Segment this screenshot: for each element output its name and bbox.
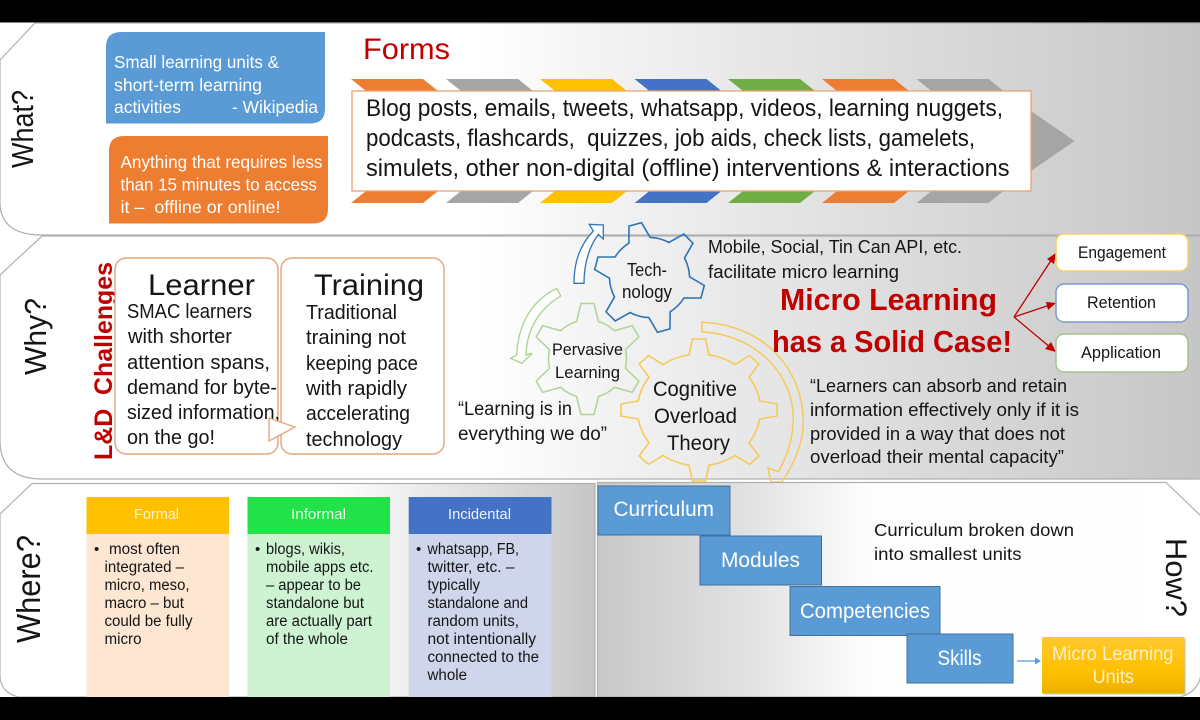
- text block: technology facilitators: [708, 236, 962, 282]
- panel: Where?: [0, 484, 595, 697]
- quote: learning is in everything: [458, 399, 607, 445]
- column: Formal: [86, 497, 229, 697]
- box: Skills: Skills: [938, 647, 982, 670]
- box: Retention: Retention: [1087, 294, 1156, 312]
- column: Incidental: standalone and: [428, 595, 528, 612]
- icon: green curved arrow: [511, 288, 561, 363]
- column: Incidental: connected to the: [428, 649, 539, 666]
- label: Pervasive Learning: Learning: [555, 363, 620, 382]
- heading: Micro Learning has a Solid Case: [772, 282, 1012, 359]
- text block: curriculum broken down: [874, 520, 1074, 564]
- text block: technology facilitators: facilitate micro learning: [708, 261, 899, 282]
- top black band: [0, 0, 1200, 22]
- column: Informal: •: [255, 541, 260, 558]
- label: Technology: [622, 260, 672, 302]
- card: Learner: with shorter: [127, 325, 232, 348]
- heading: How?: How?: [1159, 538, 1192, 617]
- heading: Micro Learning has a Solid Case: has a Solid Case!: [772, 324, 1012, 359]
- box: Curriculum: Curriculum: [614, 498, 714, 521]
- callout: definition from Wikipedia: - Wikipedia: [232, 97, 318, 117]
- label: Pervasive Learning: Pervasive: [552, 340, 623, 359]
- column: Incidental: [409, 497, 552, 697]
- column: Informal: – appear to be: [266, 577, 361, 594]
- column: Formal: most often: [109, 541, 180, 558]
- column: Incidental: whole: [427, 667, 467, 684]
- column: Formal: •: [94, 541, 99, 558]
- heading: Why?: Why?: [18, 298, 53, 375]
- column: Formal: micro, meso,: [104, 577, 190, 594]
- column: Informal: [248, 497, 390, 697]
- column: Informal: standalone but: [266, 595, 365, 612]
- callout: definition from Wikipedia: activities: [114, 97, 181, 117]
- box: Retention: [1056, 284, 1188, 322]
- callout: 15 minutes definition: Anything that requires less: [120, 152, 323, 172]
- quote: cognitive overload: [810, 375, 1079, 467]
- label: Cognitive Overload Theory: [653, 377, 737, 455]
- box: Micro Learning Units: [1042, 637, 1186, 694]
- box: Competencies: [790, 586, 940, 636]
- box: Application: [1056, 334, 1188, 372]
- label: Pervasive Learning: [552, 340, 623, 382]
- card: Learner: demand for byte-: [127, 376, 277, 399]
- card: Learner: on the go!: [127, 426, 215, 449]
- card: Learner: [115, 258, 280, 454]
- callout: definition from Wikipedia: [106, 32, 325, 124]
- heading: What?: What?: [5, 90, 40, 168]
- callout: definition from Wikipedia: Small learning units &: [114, 52, 279, 72]
- icon: blue curved arrow: [574, 224, 603, 283]
- box: Engagement: Engagement: [1078, 244, 1166, 262]
- box: Curriculum: [598, 486, 730, 535]
- arrow: forms chevron band: [351, 79, 1074, 203]
- card: Training: Training: [314, 269, 424, 302]
- quote: cognitive overload: overload their mental capacity”: [810, 446, 1064, 467]
- column: Informal: blogs, wikis,: [266, 541, 345, 558]
- panel: Why?: [0, 219, 1200, 482]
- label: Cognitive Overload Theory: Cognitive: [653, 377, 737, 401]
- callout: 15 minutes definition: it – offline or online!: [120, 197, 280, 217]
- column: Formal: micro: [104, 631, 142, 648]
- box: Micro Learning Units: Units: [1092, 667, 1134, 688]
- heading: L&D Challenges: L&D Challenges: [90, 262, 118, 460]
- callout: 15 minutes definition: than 15 minutes to access: [120, 174, 317, 194]
- icon: Pervasive Learning gear: [530, 304, 645, 414]
- box: Modules: Modules: [721, 549, 800, 572]
- column: Incidental: •: [416, 541, 421, 558]
- box: Competencies: Competencies: [800, 600, 930, 623]
- box: Modules: [700, 536, 822, 585]
- quote: learning is in everything: “Learning is in: [458, 399, 572, 420]
- card: Training: [281, 258, 444, 454]
- text block: list of forms: [352, 91, 1031, 191]
- column: Incidental: random units,: [428, 613, 519, 630]
- card: Training: Traditional: [306, 301, 397, 324]
- icon: Cognitive Overload gear: [621, 339, 777, 481]
- column: Informal: of the whole: [266, 631, 348, 648]
- arrows: case to outcomes: [1014, 253, 1056, 352]
- label: Cognitive Overload Theory: Overload: [654, 404, 737, 428]
- label: Technology: Tech-: [627, 260, 667, 280]
- panel: How?: [598, 482, 1200, 697]
- text block: list of forms: podcasts, flashcards, quizzes, job aids, check lists, gamelets,: [366, 125, 975, 152]
- column: Incidental: twitter, etc. –: [428, 559, 515, 576]
- box: Application: Application: [1081, 344, 1161, 362]
- column: Incidental: Incidental: [448, 507, 511, 523]
- quote: cognitive overload: “Learners can absorb and retain: [810, 375, 1067, 396]
- card: Learner: sized information,: [127, 401, 280, 424]
- box: Skills: [907, 634, 1013, 683]
- callout: 15 minutes definition: [109, 136, 328, 224]
- icon: Technology gear: [591, 219, 708, 336]
- column: Incidental: not intentionally: [428, 631, 536, 648]
- text block: technology facilitators: Mobile, Social, Tin Can API, etc.: [708, 236, 962, 257]
- column: Formal: macro – but: [104, 595, 185, 612]
- panel: What?: [0, 23, 1200, 235]
- column: Formal: could be fully: [104, 613, 193, 630]
- box: Engagement: [1056, 234, 1188, 271]
- column: Formal: Formal: [134, 507, 179, 523]
- column: Informal: are actually part: [266, 613, 373, 630]
- column: Informal: mobile apps etc.: [266, 559, 374, 576]
- quote: cognitive overload: provided in a way that does not: [810, 423, 1065, 444]
- column: Informal: Informal: [291, 507, 346, 523]
- card: Training: keeping pace: [306, 352, 418, 375]
- quote: learning is in everything: everything we do”: [458, 424, 607, 445]
- bottom black band: [0, 697, 1200, 720]
- arrow: skills to micro learning units: [1017, 658, 1041, 664]
- card: Learner: attention spans,: [127, 351, 270, 374]
- card: Training: with rapidly: [305, 377, 408, 400]
- heading: Micro Learning has a Solid Case: Micro Learning: [780, 282, 997, 317]
- text block: curriculum broken down: into smallest units: [874, 544, 1022, 564]
- column: Formal: integrated –: [104, 559, 184, 576]
- heading: Forms: Forms: [363, 33, 450, 66]
- label: Cognitive Overload Theory: Theory: [667, 431, 730, 455]
- column: Incidental: typically: [428, 577, 480, 594]
- card: Learner: Learner: [148, 269, 255, 302]
- card: Learner: SMAC learners: [127, 300, 252, 323]
- text block: list of forms: Blog posts, emails, tweets, whatsapp, videos, learning nuggets,: [366, 95, 1003, 122]
- quote: cognitive overload: information effectively only if it is: [810, 399, 1079, 420]
- box: Micro Learning Units: Micro Learning: [1052, 644, 1174, 665]
- label: Technology: nology: [622, 282, 672, 302]
- text block: list of forms: simulets, other non-digital (offline) interventions & interactions: [366, 155, 1010, 182]
- heading: Where?: Where?: [10, 535, 47, 643]
- text block: curriculum broken down: Curriculum broken down: [874, 520, 1074, 540]
- callout: definition from Wikipedia: short-term learning: [114, 75, 262, 95]
- card: Training: accelerating: [306, 402, 410, 425]
- arrow: learner to training: [269, 418, 295, 441]
- icon: yellow curved arrow: [702, 322, 803, 482]
- column: Incidental: whatsapp, FB,: [427, 541, 519, 558]
- card: Training: technology: [306, 428, 403, 451]
- card: Training: training not: [306, 326, 406, 349]
